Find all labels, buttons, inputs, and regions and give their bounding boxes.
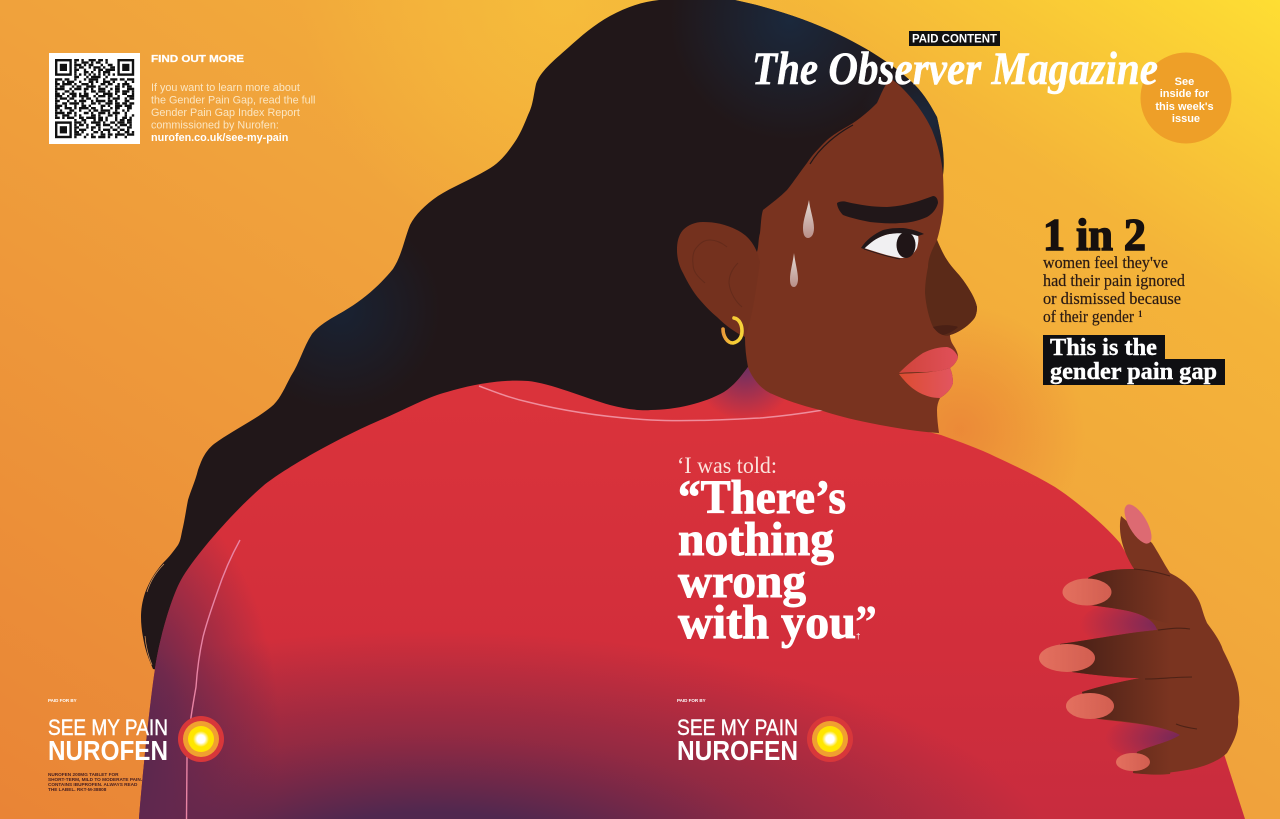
quote headline: “There’s	[678, 471, 846, 524]
tear upper	[803, 200, 814, 238]
lower eyelid line	[864, 249, 900, 259]
see inside badge: this week's	[1155, 101, 1214, 113]
centre logo	[677, 698, 853, 766]
hand shape	[1060, 516, 1239, 774]
target icon	[807, 716, 853, 762]
tear lower	[790, 253, 798, 287]
thumb nail	[1119, 500, 1157, 548]
index nail	[1062, 578, 1112, 606]
nose shadow	[925, 240, 977, 336]
gender pain gap label: This is the	[1050, 335, 1157, 361]
find out more body text: nurofen.co.uk/see-my-pain	[151, 132, 288, 144]
hair strand highlights	[145, 564, 164, 665]
nostril	[933, 325, 958, 335]
statistic text: women feel they've	[1043, 253, 1168, 272]
hair	[130, 0, 960, 710]
see my pain wordmark: SEE MY PAIN	[677, 715, 798, 740]
gender pain gap label	[1043, 335, 1225, 385]
statistic text: or dismissed because	[1043, 289, 1181, 308]
neck and face skin	[745, 78, 977, 433]
see inside badge: issue	[1172, 113, 1200, 125]
see inside badge: See	[1175, 76, 1194, 88]
find out more body text: the Gender Pain Gap, read the full	[151, 94, 315, 106]
panel: find out more	[49, 53, 318, 144]
QR code	[49, 53, 140, 144]
magazine title: The Observer Magazine	[752, 43, 1158, 95]
body shading	[139, 367, 1006, 819]
nurofen wordmark: NUROFEN	[48, 735, 168, 766]
find out more body text: commissioned by Nurofen:	[151, 120, 279, 132]
background shadow beside chin	[835, 305, 1085, 555]
see my pain wordmark: SEE MY PAIN	[48, 715, 168, 740]
ring nail	[1066, 693, 1114, 719]
iris	[896, 232, 916, 258]
lower lip	[899, 368, 953, 398]
finger shading	[1060, 569, 1180, 775]
see inside badge	[1140, 52, 1232, 144]
find out more heading: FIND OUT MORE	[151, 53, 244, 65]
statistic text: of their gender	[1043, 307, 1134, 326]
paid for by label: PAID FOR BY	[677, 698, 706, 703]
hand	[1039, 500, 1239, 775]
product disclaimer: NUROFEN 200MG TABLET FOR	[48, 772, 119, 777]
statistic panel	[1043, 209, 1225, 385]
eyebrow	[837, 196, 938, 223]
quote	[677, 453, 877, 649]
left logo	[48, 698, 224, 792]
paid content label: PAID CONTENT	[912, 34, 997, 46]
hand shadow upper	[1080, 602, 1180, 646]
eye white	[864, 233, 918, 258]
middle nail	[1039, 644, 1095, 672]
sleeve seam line	[186, 540, 240, 819]
quote headline: with you	[678, 596, 856, 649]
product disclaimer: SHORT-TERM, MILD TO MODERATE PAIN.	[48, 777, 142, 782]
hand shadow lower	[1105, 718, 1195, 758]
nurofen wordmark: NUROFEN	[677, 735, 798, 766]
find out more body text: Gender Pain Gap Index Report	[151, 107, 300, 119]
hair strand over forehead	[810, 125, 853, 164]
paid for by label: PAID FOR BY	[48, 698, 77, 703]
gender pain gap label: gender pain gap	[1050, 359, 1217, 385]
product disclaimer: THE LABEL. RKT-M-38808	[48, 787, 107, 792]
footnote marker: 1	[1138, 309, 1143, 319]
find out more body text: If you want to learn more about	[151, 82, 300, 94]
quote intro: ‘I was told:	[677, 453, 777, 478]
eyelid line	[861, 228, 924, 249]
1 in 2 figure: 1 in 2	[1043, 209, 1146, 260]
statistic text: had their pain ignored	[1043, 271, 1186, 290]
see inside badge: inside for	[1160, 88, 1210, 100]
little finger nail	[1116, 753, 1150, 771]
red jumper body	[139, 367, 1245, 819]
collar line	[479, 386, 823, 421]
upper lip	[899, 347, 958, 373]
ear	[677, 222, 760, 337]
product disclaimer: CONTAINS IBUPROFEN. ALWAYS READ	[48, 782, 138, 787]
knuckle creases	[1134, 569, 1197, 729]
masthead	[752, 31, 1232, 144]
gold hoop earring	[723, 318, 742, 343]
quote headline: nothing	[678, 513, 834, 566]
background top glow	[300, 0, 820, 260]
closing quotation mark: ”	[855, 596, 877, 649]
target icon	[178, 716, 224, 762]
inner ear line	[693, 240, 742, 307]
quote headline: wrong	[678, 555, 806, 608]
dagger mark: †	[856, 632, 860, 641]
